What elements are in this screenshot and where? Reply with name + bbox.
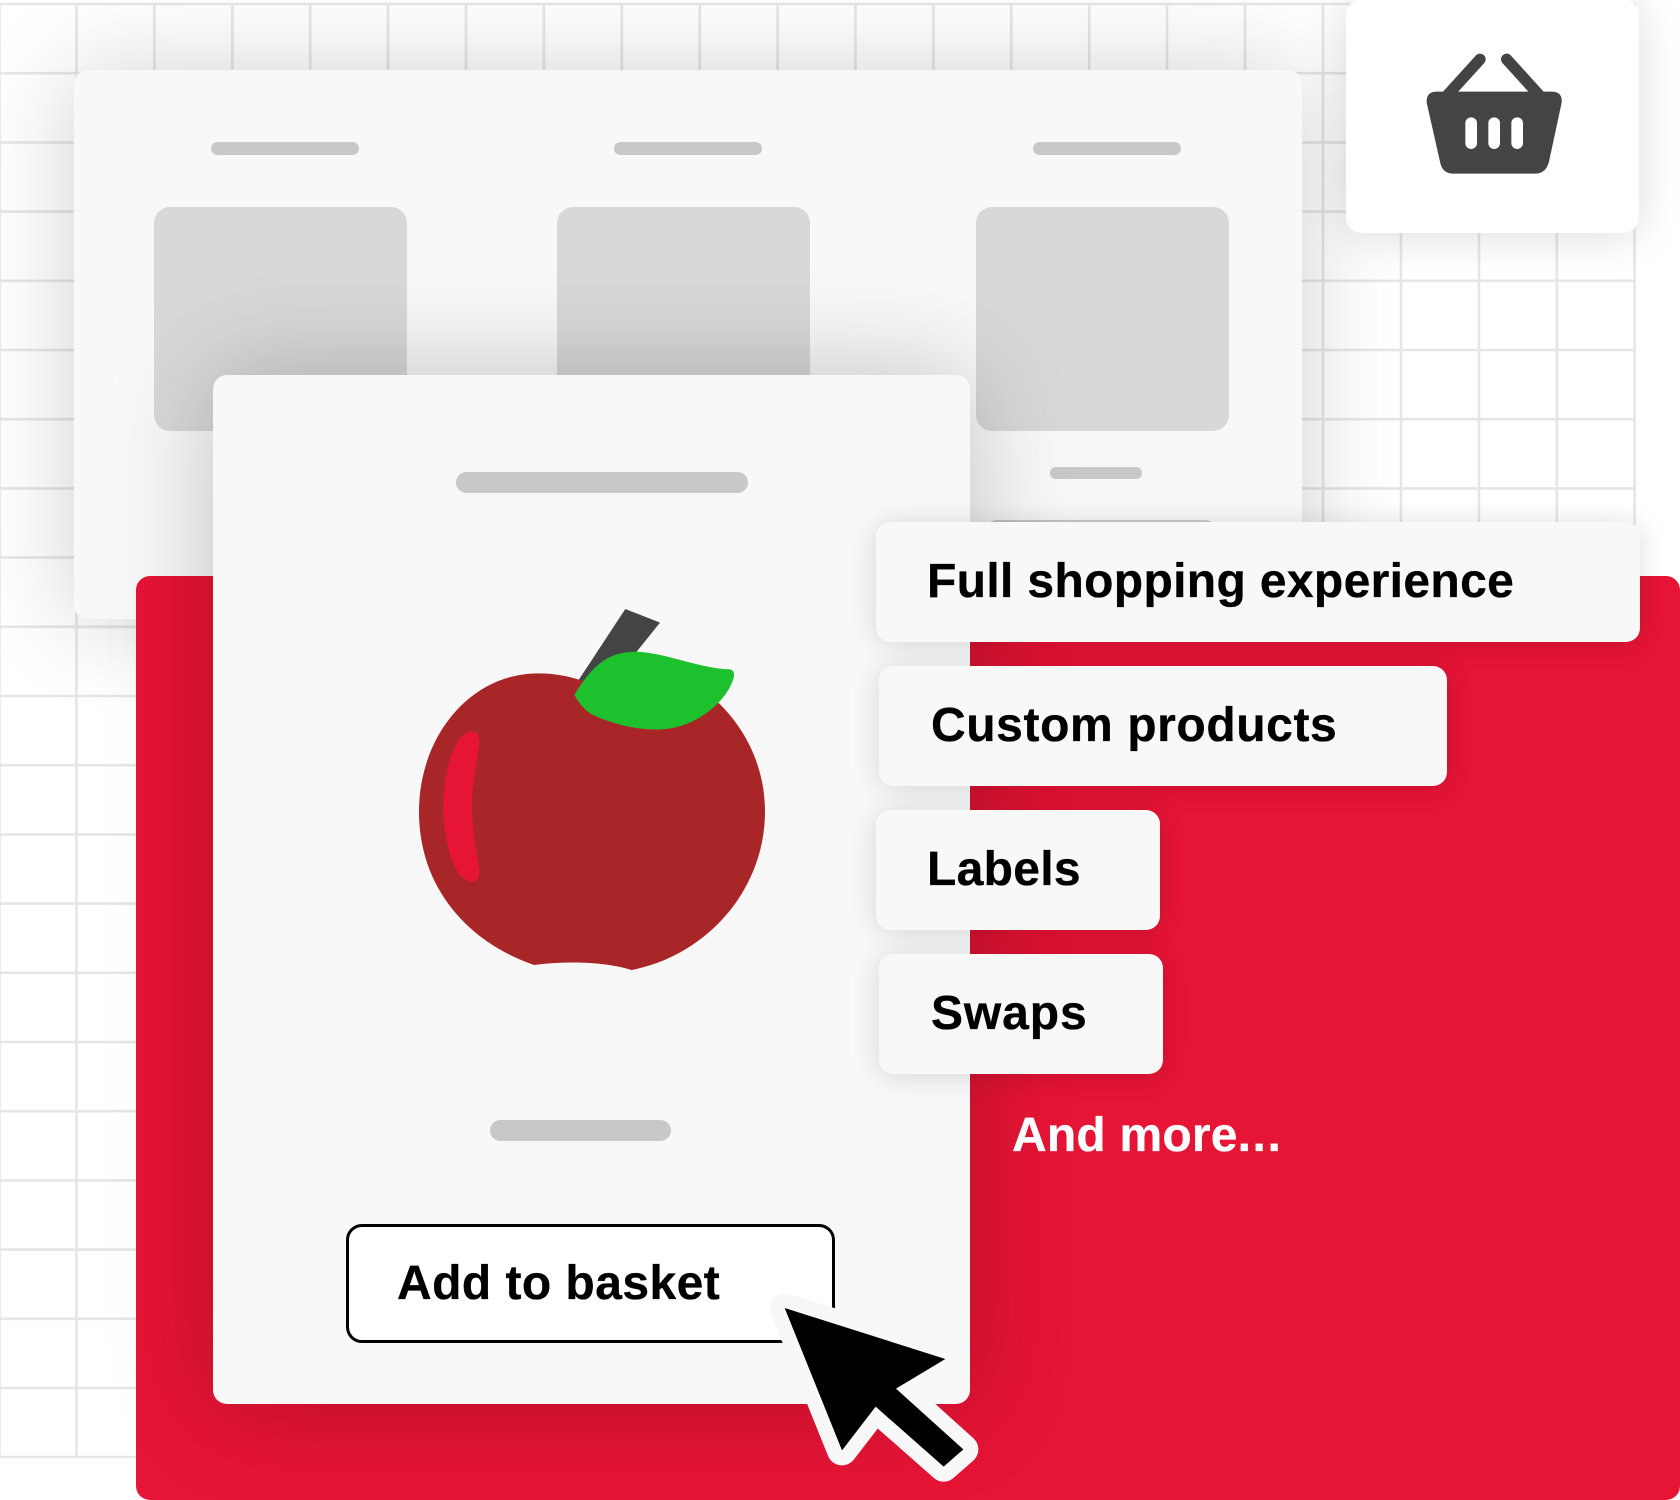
product button placeholder [985,520,1217,550]
product price placeholder [1050,467,1142,479]
product image placeholder 2 [557,207,810,431]
label: custom products: Custom products [931,699,1337,752]
icon: mouse cursor [781,1307,978,1482]
label: custom products [879,666,1447,786]
icon: shopping basket [1426,54,1562,174]
button: add to basket: Add to basket [397,1257,720,1310]
label: swaps [879,954,1163,1074]
product price placeholder [490,1120,671,1141]
product name placeholder [456,472,748,493]
product title placeholder 3 [1033,142,1181,155]
label: full shopping experience [876,522,1640,642]
product title placeholder 2 [614,142,762,155]
label: full shopping experience: Full shopping experience [927,555,1514,608]
product image placeholder 3 [976,207,1229,431]
label: swaps: Swaps [931,987,1088,1040]
icon: apple [419,609,765,970]
panel: basket card [1346,0,1639,233]
product image placeholder 1 [154,207,407,431]
panel: red background [136,576,1680,1500]
text: and more: And more... [1012,1109,1282,1162]
panel: product detail card [213,375,970,1404]
label: labels: Labels [927,843,1081,896]
button: add to basket [346,1224,835,1343]
panel: product listing page [74,70,1302,619]
product title placeholder 1 [211,142,359,155]
label: labels [876,810,1160,930]
